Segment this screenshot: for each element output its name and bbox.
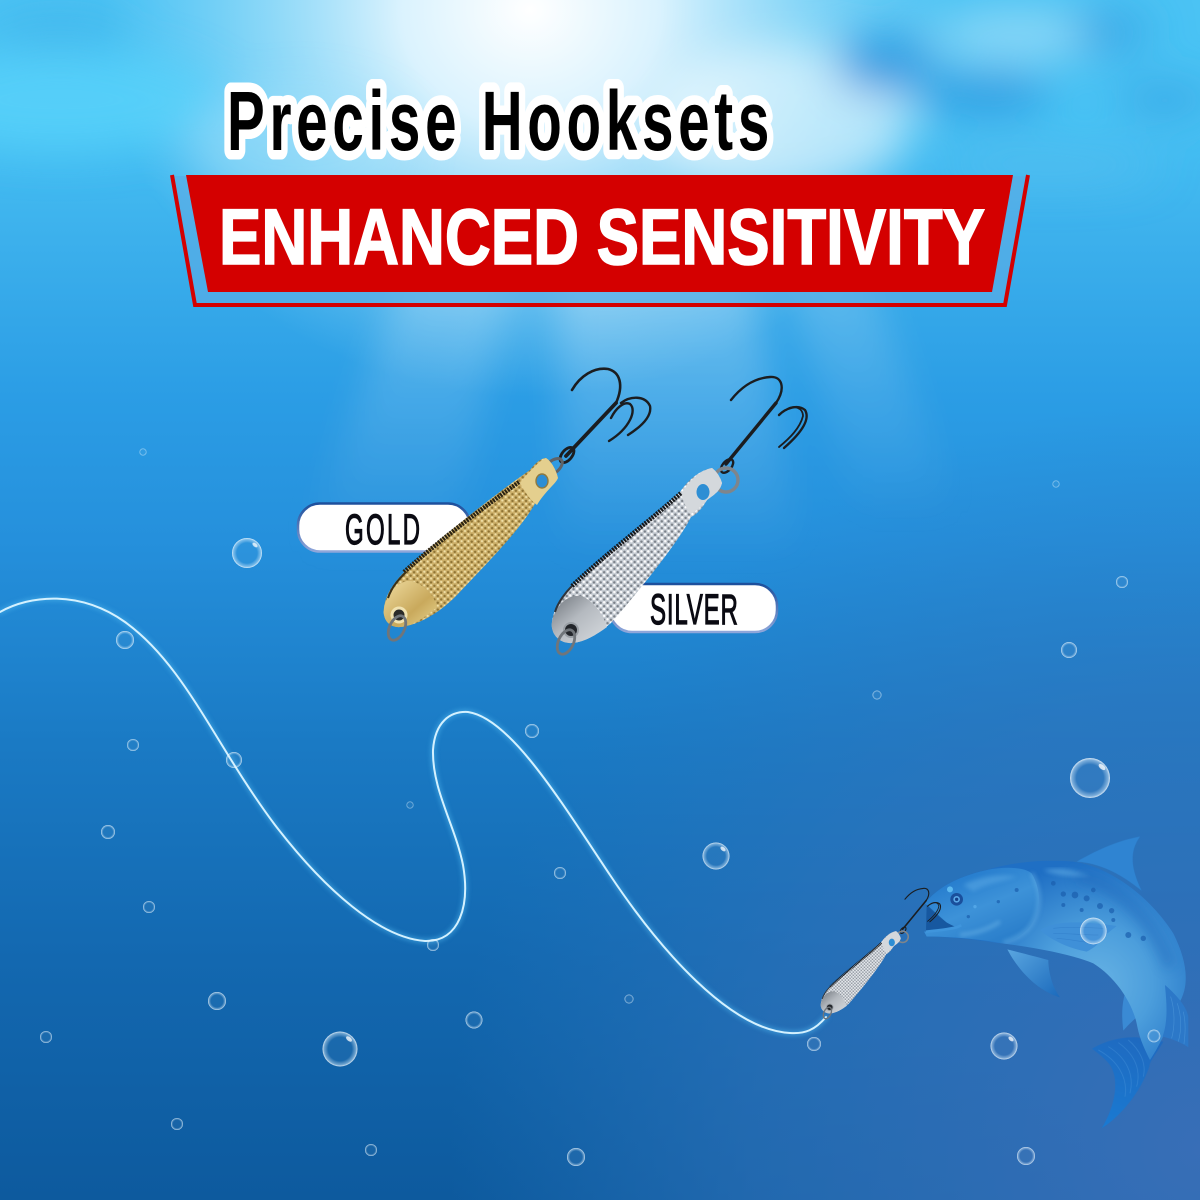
lure: silver [552,377,807,657]
hook [557,369,650,465]
label pill: SILVER [610,584,777,634]
lure body [552,468,722,643]
banner text: ENHANCED SENSITIVITY [219,192,985,281]
title: Precise Hooksets: Precise Hooksets [227,74,774,168]
belly fin [1122,993,1137,1031]
side fin [1040,922,1117,952]
hook [718,377,807,475]
pectoral fin [1007,949,1060,997]
title: Precise Hooksets [227,74,774,168]
lure body [384,458,558,627]
title: Precise Hooksets: Precise Hooksets [227,74,774,168]
tail fin [1092,1037,1163,1128]
label pill: GOLD [298,504,470,554]
split ring [541,455,565,479]
label pill: GOLD: GOLD [345,506,420,554]
fish bubbles [1080,918,1160,1042]
bubbles [40,448,1128,1166]
lure: gold [384,369,650,643]
label pill: SILVER: SILVER [650,586,738,634]
banner: Enhanced Sensitivity [172,175,1028,305]
body [924,861,1186,1060]
fishing line [0,599,826,1033]
mouth [926,905,957,932]
rear fin [1163,985,1188,1047]
lure: small silver on line [821,888,941,1020]
tail fin rays [1098,1040,1144,1097]
fish [920,837,1197,1128]
eye [950,893,963,906]
spots [967,881,1146,941]
split ring [714,468,738,492]
dorsal fin [1077,837,1142,891]
head [924,868,1039,943]
